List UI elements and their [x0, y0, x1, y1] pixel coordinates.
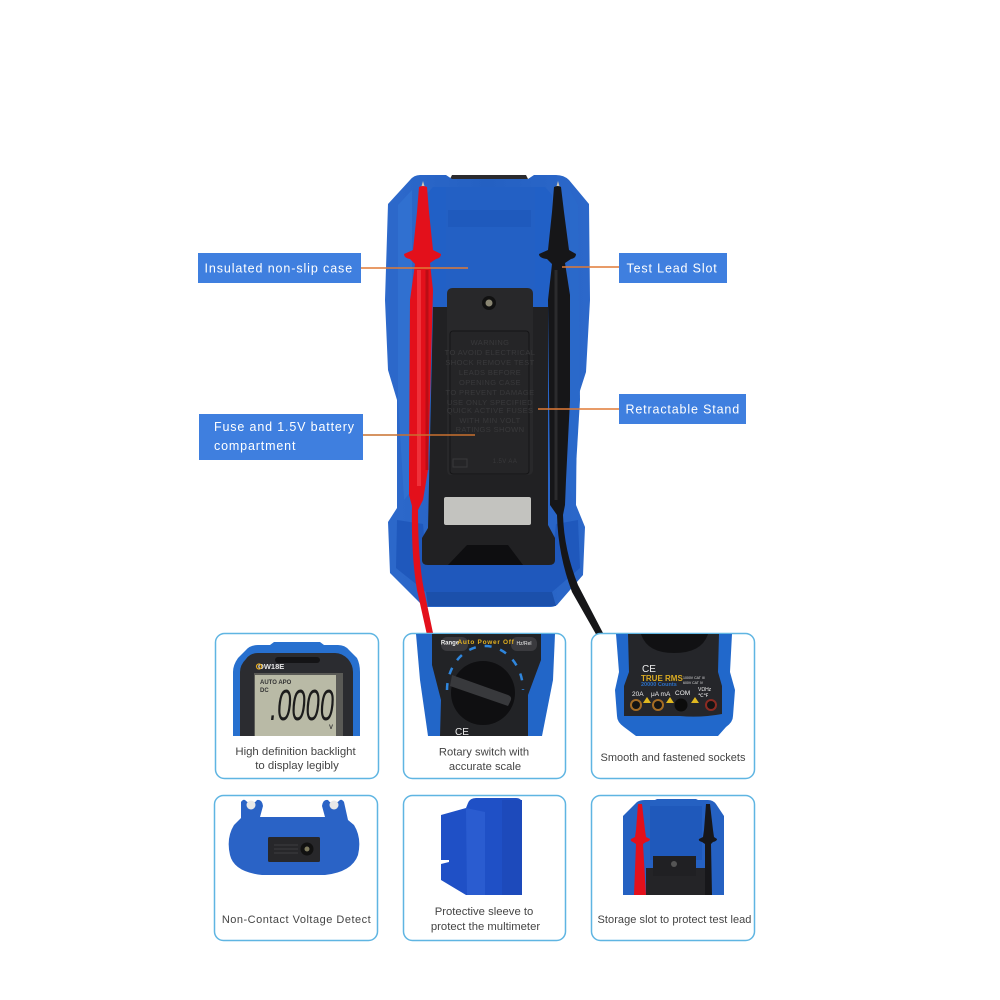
top display edge [450, 175, 528, 179]
rotary switch photo: Hz/Rel [516, 641, 532, 647]
panel: backlight display: to display legibly [255, 760, 339, 772]
stand screw [482, 296, 496, 310]
multimeter back view [385, 175, 590, 607]
side shading [398, 190, 412, 500]
sockets photo: 20000 Counts [641, 682, 677, 688]
sockets photo: VΩHz [698, 687, 712, 693]
rubber case [385, 175, 590, 607]
sockets photo: μA mA [651, 691, 671, 698]
warning text on stand: LEADS BEFORE [459, 368, 521, 377]
panel: sockets: Smooth and fastened sockets [601, 752, 746, 764]
panel: backlight display [216, 634, 378, 778]
sockets photo: TRUE RMS [641, 674, 683, 683]
case inner recess [426, 187, 552, 320]
warning text on stand: WARNING [471, 338, 509, 347]
sockets photo: 1000V CAT III [683, 676, 705, 680]
callout: fuse and battery compartment: compartment [214, 439, 296, 453]
warning text on stand: SHOCK REMOVE TEST [445, 358, 535, 367]
display photo [233, 642, 360, 736]
panel: protective sleeve: protect the multimeter [431, 921, 540, 933]
panel: non-contact voltage detect: Non-Contact Voltage Detect [222, 914, 371, 926]
warning text on stand [445, 338, 535, 465]
display photo: DC [260, 688, 269, 694]
sockets photo [615, 634, 735, 736]
panel: sockets [592, 634, 754, 778]
display photo: .0000 [270, 681, 334, 730]
warning text on stand: QUICK ACTIVE FUSES [447, 406, 533, 415]
rotary switch photo: CE [455, 727, 469, 738]
silver label [444, 497, 531, 525]
panel: rotary switch: accurate scale [449, 761, 521, 773]
warning text on stand: RATINGS SHOWN [456, 425, 524, 434]
warning text on stand: OPENING CASE [459, 378, 521, 387]
sockets photo: 20A [632, 691, 644, 698]
callout: fuse and battery compartment: Fuse and 1.5V battery [214, 420, 355, 434]
sockets photo: CE [642, 664, 656, 675]
bottom notch [448, 545, 523, 565]
panel: protective sleeve: Protective sleeve to [435, 906, 533, 918]
rotary switch photo: Auto Power Off [457, 639, 515, 646]
rotary switch photo: Range [441, 640, 460, 646]
panel: protective sleeve [404, 796, 566, 940]
panel: storage slot: Storage slot to protect test lead [598, 914, 751, 926]
panel: rotary switch: Rotary switch with [439, 746, 529, 758]
callout: test lead slot [562, 253, 727, 283]
black test lead [539, 181, 603, 636]
callout: retractable stand [538, 394, 746, 424]
red test lead [404, 181, 441, 635]
storage slot photo [623, 799, 724, 895]
top view photo [229, 800, 359, 875]
rotary switch photo [416, 634, 555, 738]
panel: storage slot [592, 796, 754, 940]
sockets photo: 600V CAT IV [683, 681, 704, 685]
black body [422, 307, 555, 565]
sockets photo: COM [675, 690, 690, 697]
callout: insulated non-slip case: Insulated non-slip case [204, 262, 353, 276]
sockets photo: ℃℉ [698, 693, 709, 699]
warning text on stand: WITH MIN VOLT [459, 416, 521, 425]
display photo: AUTO APO [260, 680, 292, 686]
callout: insulated non-slip case [198, 253, 468, 283]
retractable stand [445, 288, 535, 475]
warning text on stand: 1.5V AA [493, 459, 517, 465]
callout: fuse and battery compartment [199, 414, 475, 460]
callout: retractable stand: Retractable Stand [626, 402, 740, 416]
callout: test lead slot: Test Lead Slot [626, 262, 718, 276]
sleeve photo [441, 798, 522, 895]
display photo: V [329, 725, 333, 731]
warning text on stand: USE ONLY SPECIFIED [447, 398, 533, 407]
panel: rotary switch [404, 634, 566, 778]
panel: backlight display: High definition backlight [235, 746, 356, 758]
warning text on stand: TO AVOID ELECTRICAL [445, 348, 535, 357]
display photo: OW18E [258, 662, 284, 671]
warning text on stand: TO PREVENT DAMAGE [445, 388, 535, 397]
panel: non-contact voltage detect [214, 796, 378, 940]
